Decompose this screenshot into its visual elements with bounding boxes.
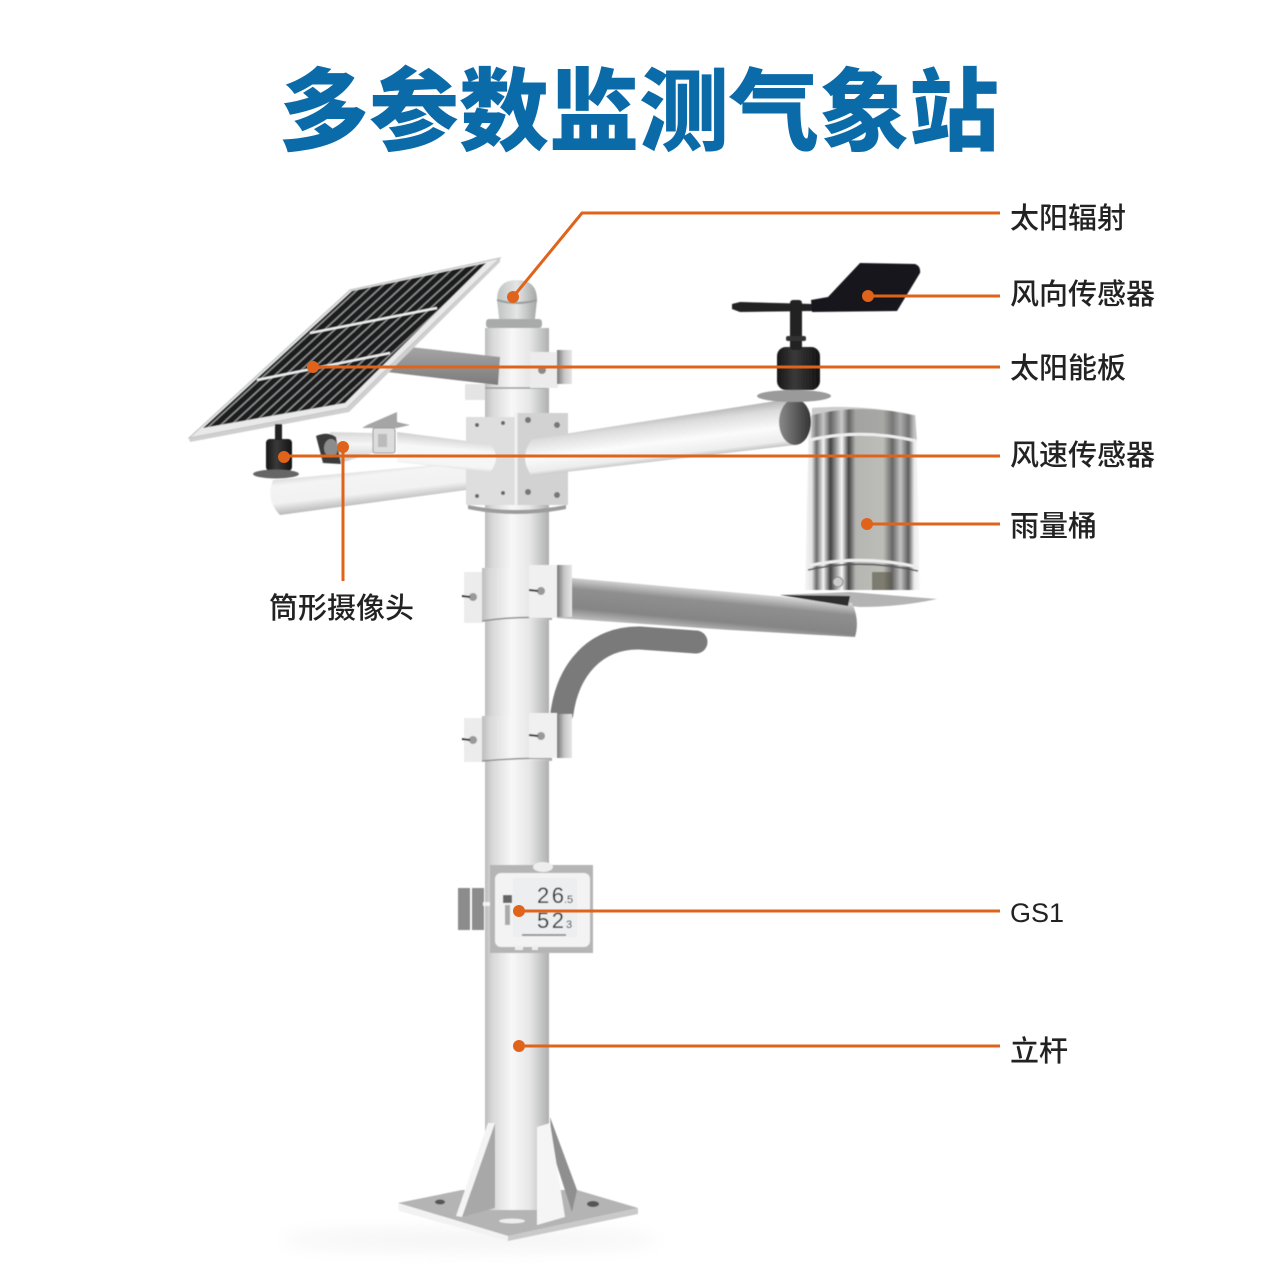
left upper arm xyxy=(397,432,496,472)
callout: 雨量桶: 雨量桶 xyxy=(1010,503,1097,545)
curved conduit xyxy=(562,638,696,713)
right upper arm xyxy=(525,398,795,476)
camera xyxy=(316,412,410,464)
rain gauge base plate xyxy=(780,592,937,607)
ground shadow xyxy=(280,1230,660,1250)
GS1 display unit: .5 xyxy=(564,894,573,906)
callout: 雨量桶 xyxy=(861,503,1097,545)
wind speed sensor xyxy=(253,424,299,478)
GS1 display unit: 3 xyxy=(566,919,572,931)
wind vane xyxy=(732,263,920,402)
callout: 风速传感器 xyxy=(278,432,1155,474)
mounting base xyxy=(398,1100,638,1241)
callout: GS1: GS1 xyxy=(1010,898,1064,928)
callout: 太阳辐射: 太阳辐射 xyxy=(1010,195,1126,237)
top clamp xyxy=(530,350,572,388)
GS1 display unit xyxy=(458,862,593,953)
left lower arm xyxy=(270,462,466,515)
rain gauge bucket xyxy=(805,407,920,590)
lower support arm xyxy=(557,578,857,637)
title: 多参数监测气象站 xyxy=(279,39,999,169)
arm open end xyxy=(779,399,811,445)
upper pole clamp xyxy=(462,565,572,623)
weather station illustration xyxy=(189,258,937,1250)
callout: 太阳辐射 xyxy=(507,195,1126,303)
callout: 太阳能板 xyxy=(307,345,1126,387)
GS1 display unit: 52 xyxy=(537,908,564,933)
callout: 风向传感器 xyxy=(862,271,1155,313)
solar radiation sensor xyxy=(486,280,542,328)
callout: 筒形摄像头 xyxy=(269,441,414,627)
callout: 风速传感器: 风速传感器 xyxy=(1010,432,1155,474)
callout: 风向传感器: 风向传感器 xyxy=(1010,271,1155,313)
callout: 筒形摄像头: 筒形摄像头 xyxy=(269,585,414,627)
GS1 display unit: 26 xyxy=(537,883,564,908)
cross clamp plate xyxy=(466,413,568,514)
callout: GS1 xyxy=(513,898,1064,928)
callout: 太阳能板: 太阳能板 xyxy=(1010,345,1126,387)
pole section joint xyxy=(485,387,547,389)
pole xyxy=(485,328,549,1188)
solar panel xyxy=(189,258,500,442)
solar panel bracket xyxy=(387,347,500,400)
callout: 立杆 xyxy=(513,1028,1068,1070)
callout: 立杆: 立杆 xyxy=(1010,1028,1068,1070)
lower pole clamp xyxy=(462,713,572,762)
